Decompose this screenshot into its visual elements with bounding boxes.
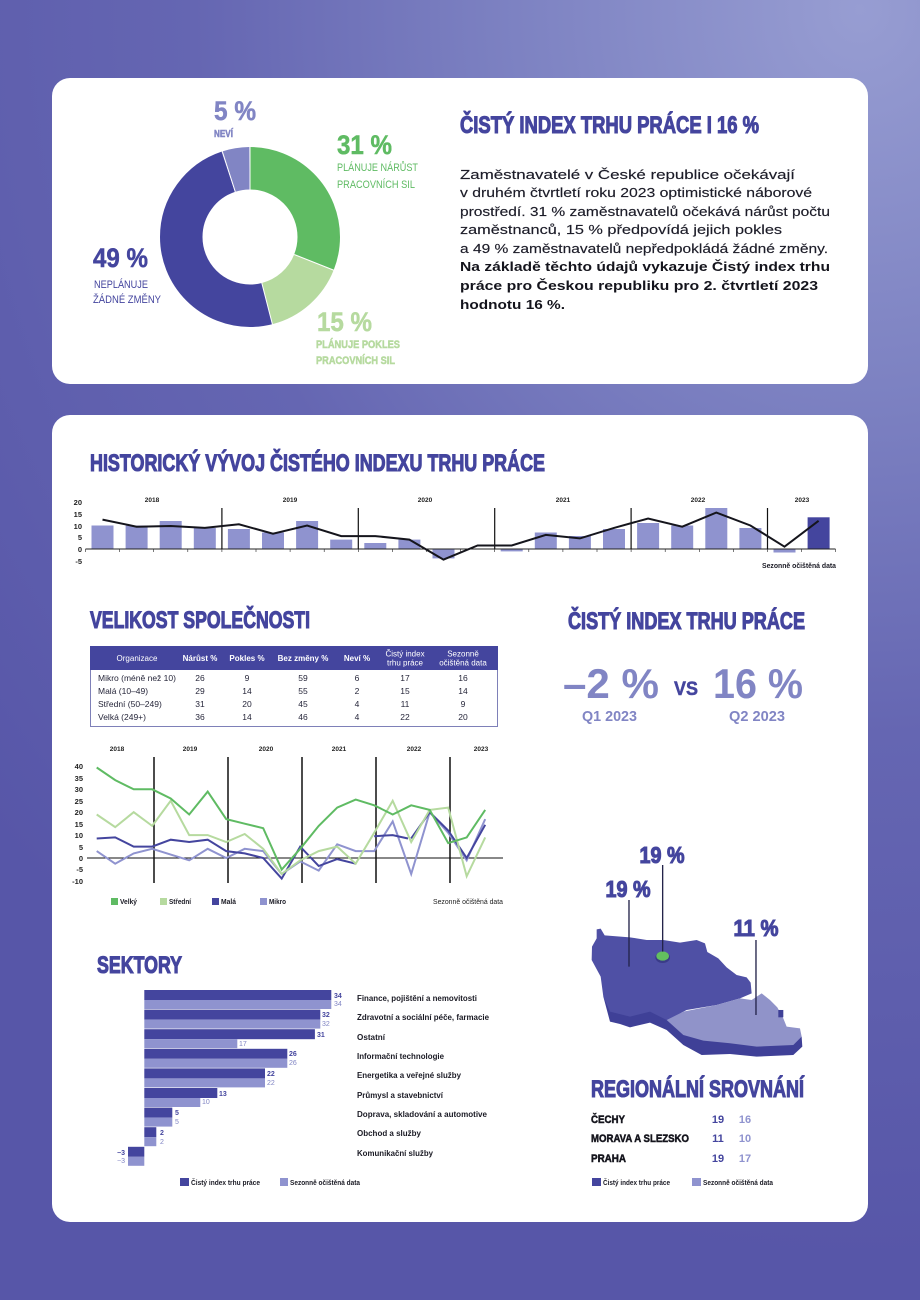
- table: company size: Bez změny %: [278, 654, 328, 663]
- table: company size: Velká (249+): [98, 712, 146, 722]
- table: company size: Sezonně: [447, 650, 479, 658]
- chart: historical net index: Sezonně očištěná data: [762, 563, 836, 570]
- text block: summary: zaměstnanců, 15 % předpovídá jejich pokles: [460, 222, 783, 237]
- table: company size: 9: [245, 673, 250, 683]
- donut label: 5 % don't know: NEVÍ: [214, 127, 233, 140]
- chart: company size trend: 2020: [259, 746, 274, 753]
- chart: historical net index: [74, 497, 836, 570]
- legend: company size: Střední: [169, 899, 192, 906]
- panel: detail: [52, 415, 868, 1222]
- panel: net index summary: [52, 78, 868, 384]
- table: company size: 26: [195, 673, 205, 683]
- legend: company size: Sezonně očištěná data: [433, 899, 503, 906]
- comparison: Q1 vs Q2 2023: VS: [674, 679, 698, 700]
- text block: summary: práce pro Českou republiku pro 2. čtvrtletí 2023: [460, 278, 818, 293]
- donut label: 31 % growth: PRACOVNÍCH SIL: [337, 178, 415, 191]
- chart: company size trend: 0: [79, 854, 83, 863]
- chart: company size trend: 2019: [183, 746, 198, 753]
- chart: company size trend: 40: [75, 762, 83, 771]
- donut label: 31 % growth: PLÁNUJE NÁRŮST: [337, 161, 418, 174]
- chart: sectors: 2: [160, 1139, 164, 1146]
- chart: company size trend: 2018: [110, 746, 125, 753]
- chart: company size trend: 25: [75, 797, 83, 806]
- table: company size: 6: [355, 673, 360, 683]
- chart: sectors: Průmysl a stavebnictví: [357, 1091, 444, 1100]
- chart: sectors: 22: [267, 1071, 275, 1078]
- table: company size: 16: [458, 673, 468, 683]
- chart: sectors: 32: [322, 1012, 330, 1019]
- chart: sectors: 26: [289, 1060, 297, 1067]
- donut label: 5 % don't know: [214, 96, 256, 140]
- table: regional comparison: [591, 1113, 751, 1165]
- chart: sectors: 17: [239, 1041, 247, 1048]
- legend: regions: Sezonně očištěná data: [703, 1180, 773, 1187]
- table: regional comparison: 11: [712, 1133, 724, 1145]
- chart: sectors: 5: [175, 1119, 179, 1126]
- table: regional comparison: ČECHY: [591, 1113, 626, 1126]
- comparison: Q1 vs Q2 2023: 16 %: [713, 660, 803, 707]
- table: company size: 4: [355, 699, 360, 709]
- table: company size: 45: [298, 699, 308, 709]
- legend: sectors: Sezonně očištěná data: [290, 1180, 360, 1187]
- table: company size: 17: [400, 673, 410, 683]
- table: regional comparison: 16: [739, 1114, 751, 1126]
- chart: sectors: 34: [334, 993, 342, 1000]
- chart: sectors: 5: [175, 1110, 179, 1117]
- comparison: Q1 vs Q2 2023: –2 %: [563, 660, 659, 707]
- chart: historical net index: 2022: [691, 497, 706, 504]
- table: company size: [90, 646, 498, 726]
- donut label: 15 % decline: 15 %: [317, 307, 372, 337]
- table: company size: Mikro (méně než 10): [98, 673, 176, 683]
- chart: sectors: 32: [322, 1021, 330, 1028]
- chart: historical net index: 2020: [418, 497, 433, 504]
- table: company size: 20: [242, 699, 252, 709]
- chart: company size trend: 5: [79, 843, 83, 852]
- table: company size: Malá (10–49): [98, 686, 148, 696]
- heading: net index 16 %: ČISTÝ INDEX TRHU PRÁCE I 16 %: [460, 111, 759, 139]
- chart: sectors: 26: [289, 1051, 297, 1058]
- table: company size: Pokles %: [229, 654, 265, 663]
- text block: summary: prostředí. 31 % zaměstnavatelů očekává nárůst počtu: [460, 204, 830, 219]
- chart: sectors: Zdravotní a sociální péče, farmacie: [357, 1013, 490, 1022]
- table: company size: Neví %: [344, 654, 370, 663]
- table: company size: 46: [298, 712, 308, 722]
- text block: summary: hodnotu 16 %.: [460, 297, 565, 312]
- chart: company size trend: 2023: [474, 746, 489, 753]
- chart: sectors: Finance, pojištění a nemovitosti: [357, 994, 477, 1003]
- chart: historical net index: 2018: [145, 497, 160, 504]
- donut label: 31 % growth: [337, 130, 418, 191]
- table: company size: 14: [242, 686, 252, 696]
- legend: company size: [111, 898, 503, 906]
- chart: historical net index: 15: [74, 510, 82, 519]
- chart: sectors: −3: [117, 1150, 125, 1157]
- legend: regions: Čistý index trhu práce: [603, 1178, 670, 1187]
- text block: summary: v druhém čtvrtletí roku 2023 optimistické náborové: [460, 185, 812, 200]
- table: company size: očištěná data: [439, 658, 487, 668]
- comparison: Q1 vs Q2 2023: [563, 660, 803, 725]
- legend: regions: [592, 1178, 773, 1187]
- chart: company size trend: [72, 746, 503, 906]
- table: company size: 20: [458, 712, 468, 722]
- chart: company size trend: 20: [75, 808, 83, 817]
- map: regions: 19 %: [640, 842, 684, 868]
- chart: historical net index: 20: [74, 498, 82, 507]
- chart: sectors: 13: [219, 1091, 227, 1098]
- table: company size: 11: [401, 699, 410, 709]
- donut label: 49 % no change: ŽÁDNÉ ZMĚNY: [93, 293, 162, 306]
- table: regional comparison: 19: [712, 1114, 724, 1126]
- comparison: Q1 vs Q2 2023: Q1 2023: [582, 708, 637, 725]
- chart: sectors: Obchod a služby: [357, 1129, 422, 1138]
- table: company size: 9: [461, 699, 466, 709]
- chart: historical net index: 5: [78, 533, 82, 542]
- legend: sectors: [180, 1178, 360, 1187]
- chart: sectors: Ostatní: [357, 1033, 386, 1042]
- donut label: 5 % don't know: 5 %: [214, 96, 256, 126]
- text block: summary: Na základě těchto údajů vykazuje Čistý index trhu: [460, 259, 830, 274]
- chart: sectors: 31: [317, 1032, 325, 1039]
- map: regions: [592, 842, 802, 1057]
- table: regional comparison: PRAHA: [591, 1153, 626, 1165]
- chart: historical net index: 2019: [283, 497, 298, 504]
- text block: summary: [460, 167, 830, 312]
- table: company size: 14: [242, 712, 252, 722]
- table: regional comparison: 10: [739, 1133, 751, 1145]
- donut label: 15 % decline: PRACOVNÍCH SIL: [316, 354, 395, 367]
- table: company size: 15: [400, 686, 410, 696]
- chart: company size trend: 35: [75, 774, 83, 783]
- table: company size: Nárůst %: [183, 654, 217, 663]
- table: company size: Organizace: [117, 654, 158, 663]
- chart: sectors: 10: [202, 1099, 210, 1106]
- chart: historical net index: -5: [75, 557, 82, 566]
- heading: net index comparison: ČISTÝ INDEX TRHU PRÁCE: [568, 607, 805, 635]
- map: regions: 19 %: [606, 876, 650, 902]
- chart: company size trend: -10: [72, 877, 83, 886]
- table: company size: 59: [298, 673, 308, 683]
- table: company size: Čistý index: [385, 650, 425, 658]
- chart: sectors: Komunikační služby: [357, 1149, 434, 1158]
- table: regional comparison: 19: [712, 1153, 724, 1165]
- donut label: 49 % no change: NEPLÁNUJE: [94, 278, 148, 291]
- donut label: 49 % no change: 49 %: [93, 243, 148, 273]
- table: company size: 14: [458, 686, 468, 696]
- chart: sectors: 34: [334, 1001, 342, 1008]
- donut label: 15 % decline: [316, 307, 400, 367]
- chart: sectors: Informační technologie: [357, 1052, 445, 1061]
- chart: company size trend: -5: [76, 865, 83, 874]
- table: company size: 22: [400, 712, 410, 722]
- chart: company size trend: 2021: [332, 746, 347, 753]
- chart: historical net index: 10: [74, 522, 82, 531]
- heading: regional comparison: REGIONÁLNÍ SROVNÁNÍ: [591, 1075, 805, 1103]
- heading: sectors: SEKTORY: [97, 952, 182, 979]
- donut chart: [181, 146, 334, 325]
- chart: historical net index: 0: [78, 545, 82, 554]
- donut label: 49 % no change: [93, 243, 162, 306]
- table: company size: 2: [355, 686, 360, 696]
- chart: company size trend: 15: [75, 820, 83, 829]
- legend: company size: Malá: [221, 899, 236, 906]
- chart: historical net index: 2021: [556, 497, 571, 504]
- table: company size: 29: [195, 686, 205, 696]
- chart: sectors: Energetika a veřejné služby: [357, 1071, 462, 1080]
- donut label: 31 % growth: 31 %: [337, 130, 392, 160]
- chart: company size trend: 10: [75, 831, 83, 840]
- text block: summary: Zaměstnavatelé v České republice očekávají: [460, 167, 795, 182]
- donut label: 15 % decline: PLÁNUJE POKLES: [316, 338, 400, 351]
- legend: company size: Mikro: [269, 899, 286, 906]
- chart: historical net index: 2023: [795, 497, 810, 504]
- chart: sectors: [117, 990, 490, 1187]
- text block: summary: a 49 % zaměstnavatelů nepředpokládá žádné změny.: [460, 241, 828, 256]
- chart: company size trend: 2022: [407, 746, 422, 753]
- chart: sectors: −3: [117, 1158, 125, 1165]
- table: company size: trhu práce: [387, 658, 424, 668]
- table: company size: Střední (50–249): [98, 699, 162, 709]
- legend: company size: Velký: [120, 899, 137, 906]
- chart: sectors: 2: [160, 1130, 164, 1137]
- comparison: Q1 vs Q2 2023: Q2 2023: [729, 708, 785, 725]
- table: company size: 31: [195, 699, 205, 709]
- chart: sectors: 22: [267, 1080, 275, 1087]
- table: regional comparison: 17: [739, 1153, 751, 1165]
- table: company size: 4: [355, 712, 360, 722]
- chart: sectors: Doprava, skladování a automotive: [357, 1110, 488, 1119]
- table: regional comparison: MORAVA A SLEZSKO: [591, 1133, 689, 1145]
- heading: historical trend: HISTORICKÝ VÝVOJ ČISTÉHO INDEXU TRHU PRÁCE: [90, 449, 545, 477]
- table: company size: 36: [195, 712, 205, 722]
- legend: sectors: Čistý index trhu práce: [191, 1178, 260, 1187]
- chart: company size trend: 30: [75, 785, 83, 794]
- map: regions: 11 %: [734, 915, 778, 941]
- heading: company size: VELIKOST SPOLEČNOSTI: [90, 606, 310, 634]
- table: company size: 55: [298, 686, 308, 696]
